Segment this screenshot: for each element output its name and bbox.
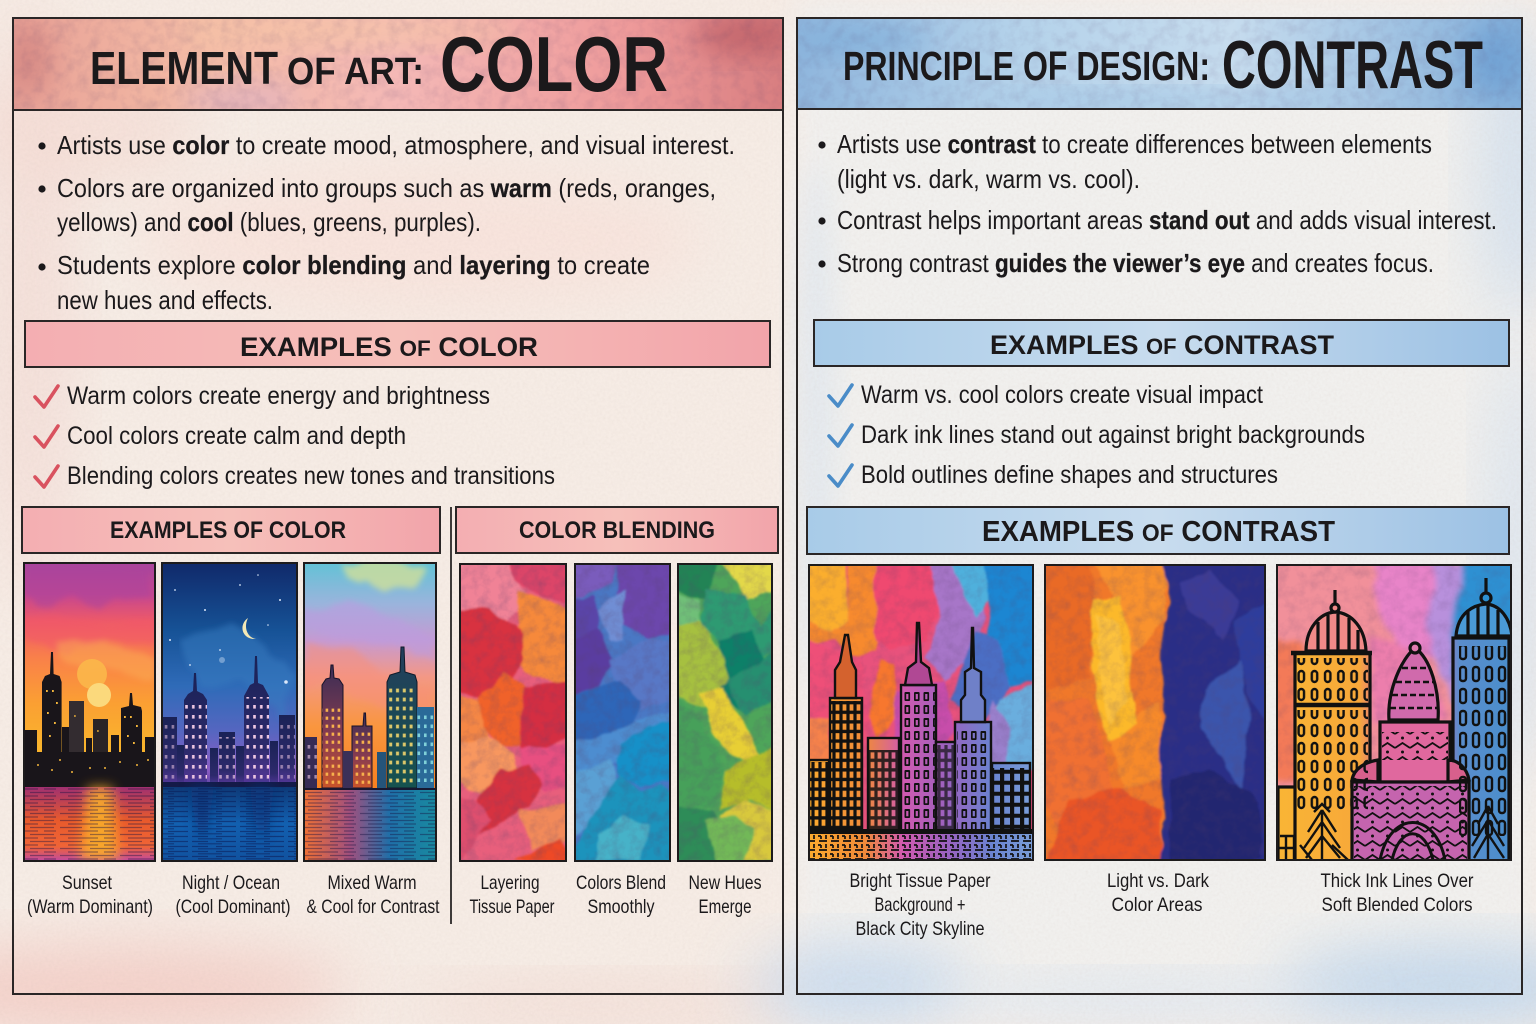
ink plants (1278, 804, 1504, 860)
captions: color blending: Emerge (698, 896, 752, 918)
captions: contrast examples: Black City Skyline (856, 918, 984, 940)
panel frame (13, 110, 783, 994)
captions: color examples: & Cool for Contrast (306, 896, 440, 918)
bullet list: color: Colors are organized into groups such as warm (reds, oranges, (57, 173, 716, 203)
captions: contrast examples (850, 870, 1474, 940)
image: colors blend smoothly (570, 560, 675, 865)
title banner: element of art color: ELEMENT (90, 42, 278, 94)
captions: color blending: Layering (480, 872, 540, 894)
captions: contrast examples: Color Areas (1112, 894, 1203, 916)
captions: color examples: Mixed Warm (328, 872, 416, 894)
captions: color examples (27, 872, 440, 918)
ink buildings (1278, 578, 1512, 863)
title banner: principle of design contrast (790, 18, 1525, 112)
captions: color examples: (Warm Dominant) (27, 896, 153, 918)
image: layering tissue paper (455, 560, 570, 862)
captions: contrast examples: Light vs. Dark (1107, 870, 1209, 892)
captions: contrast examples: Thick Ink Lines Over (1320, 870, 1474, 892)
captions: color blending: Colors Blend (576, 872, 666, 894)
bullet list: color: yellows) and cool (blues, greens, purples). (57, 207, 481, 237)
captions: color blending (470, 872, 762, 918)
captions: color examples: Sunset (62, 872, 112, 894)
icon: crescent moon (242, 618, 256, 639)
checklist: color: Warm colors create energy and brightness (67, 382, 490, 410)
heading bar: examples of color small (22, 507, 440, 553)
captions: contrast examples: Background + (874, 894, 966, 916)
captions: color examples: (Cool Dominant) (176, 896, 290, 918)
title banner: element of art color: OF ART: (287, 51, 424, 93)
bullet list: color (38, 130, 735, 315)
title banner: element of art color: COLOR (440, 20, 668, 108)
bullet list: color: new hues and effects. (57, 285, 273, 315)
heading bar: color blending: COLOR BLENDING (519, 517, 715, 544)
title banner: element of art color (4, 15, 795, 116)
heading bar: examples of contrast large (807, 507, 1509, 554)
title banner: principle of design contrast: PRINCIPLE OF DESIGN: (843, 43, 1210, 89)
checklist: color: Cool colors create calm and depth (67, 422, 406, 450)
captions: color blending: Tissue Paper (470, 896, 555, 918)
bullet list: contrast: Strong contrast guides the viewer’s eye and creates focus. (837, 248, 1434, 278)
panel: principle of design contrast (790, 18, 1525, 994)
heading bar: examples of contrast: EXAMPLES OF CONTRAST (990, 330, 1334, 360)
captions: color blending: New Hues (688, 872, 762, 894)
checklist: color: Blending colors creates new tones and transitions (67, 462, 555, 490)
heading bar: examples of color small: EXAMPLES OF COLOR (110, 517, 346, 544)
ink skyline (809, 623, 1030, 835)
checklist: contrast: Dark ink lines stand out against bright backgrounds (861, 421, 1365, 449)
image: thick ink lines over blended colors (1270, 555, 1520, 863)
captions: contrast examples: Soft Blended Colors (1322, 894, 1473, 916)
heading bar: examples of color: EXAMPLES OF COLOR (240, 332, 538, 362)
panel: element of art color (4, 15, 795, 994)
heading bar: examples of contrast large: EXAMPLES OF CONTRAST (982, 516, 1335, 548)
bullet list: contrast (818, 129, 1497, 278)
image: bright tissue paper with black skyline (805, 560, 1040, 860)
bullet list: contrast: Artists use contrast to create differences between elements (837, 129, 1432, 159)
bullet list: contrast: (light vs. dark, warm vs. cool). (837, 164, 1140, 194)
heading bar: examples of color (25, 321, 770, 367)
heading bar: color blending (456, 507, 778, 553)
image: sunset city (24, 563, 155, 861)
bullet list: color: Artists use color to create mood, atmosphere, and visual interest. (57, 130, 735, 160)
image: night ocean city (162, 563, 297, 861)
captions: color examples: Night / Ocean (182, 872, 280, 894)
checklist: contrast: Warm vs. cool colors create visual impact (861, 381, 1263, 409)
bullet list: color: Students explore color blending and layering to create (57, 250, 650, 280)
bullet list: contrast: Contrast helps important areas stand out and adds visual interest. (837, 205, 1497, 235)
checklist: contrast (829, 381, 1365, 489)
captions: color blending: Smoothly (588, 896, 655, 918)
image: light versus dark color areas (1044, 564, 1266, 861)
panel frame (797, 109, 1522, 994)
image: new hues emerge (675, 560, 776, 862)
checklist: color (35, 382, 555, 490)
image: mixed warm and cool city (304, 563, 436, 861)
captions: contrast examples: Bright Tissue Paper (850, 870, 991, 892)
heading bar: examples of contrast (814, 320, 1509, 366)
checklist: contrast: Bold outlines define shapes and structures (861, 461, 1278, 489)
